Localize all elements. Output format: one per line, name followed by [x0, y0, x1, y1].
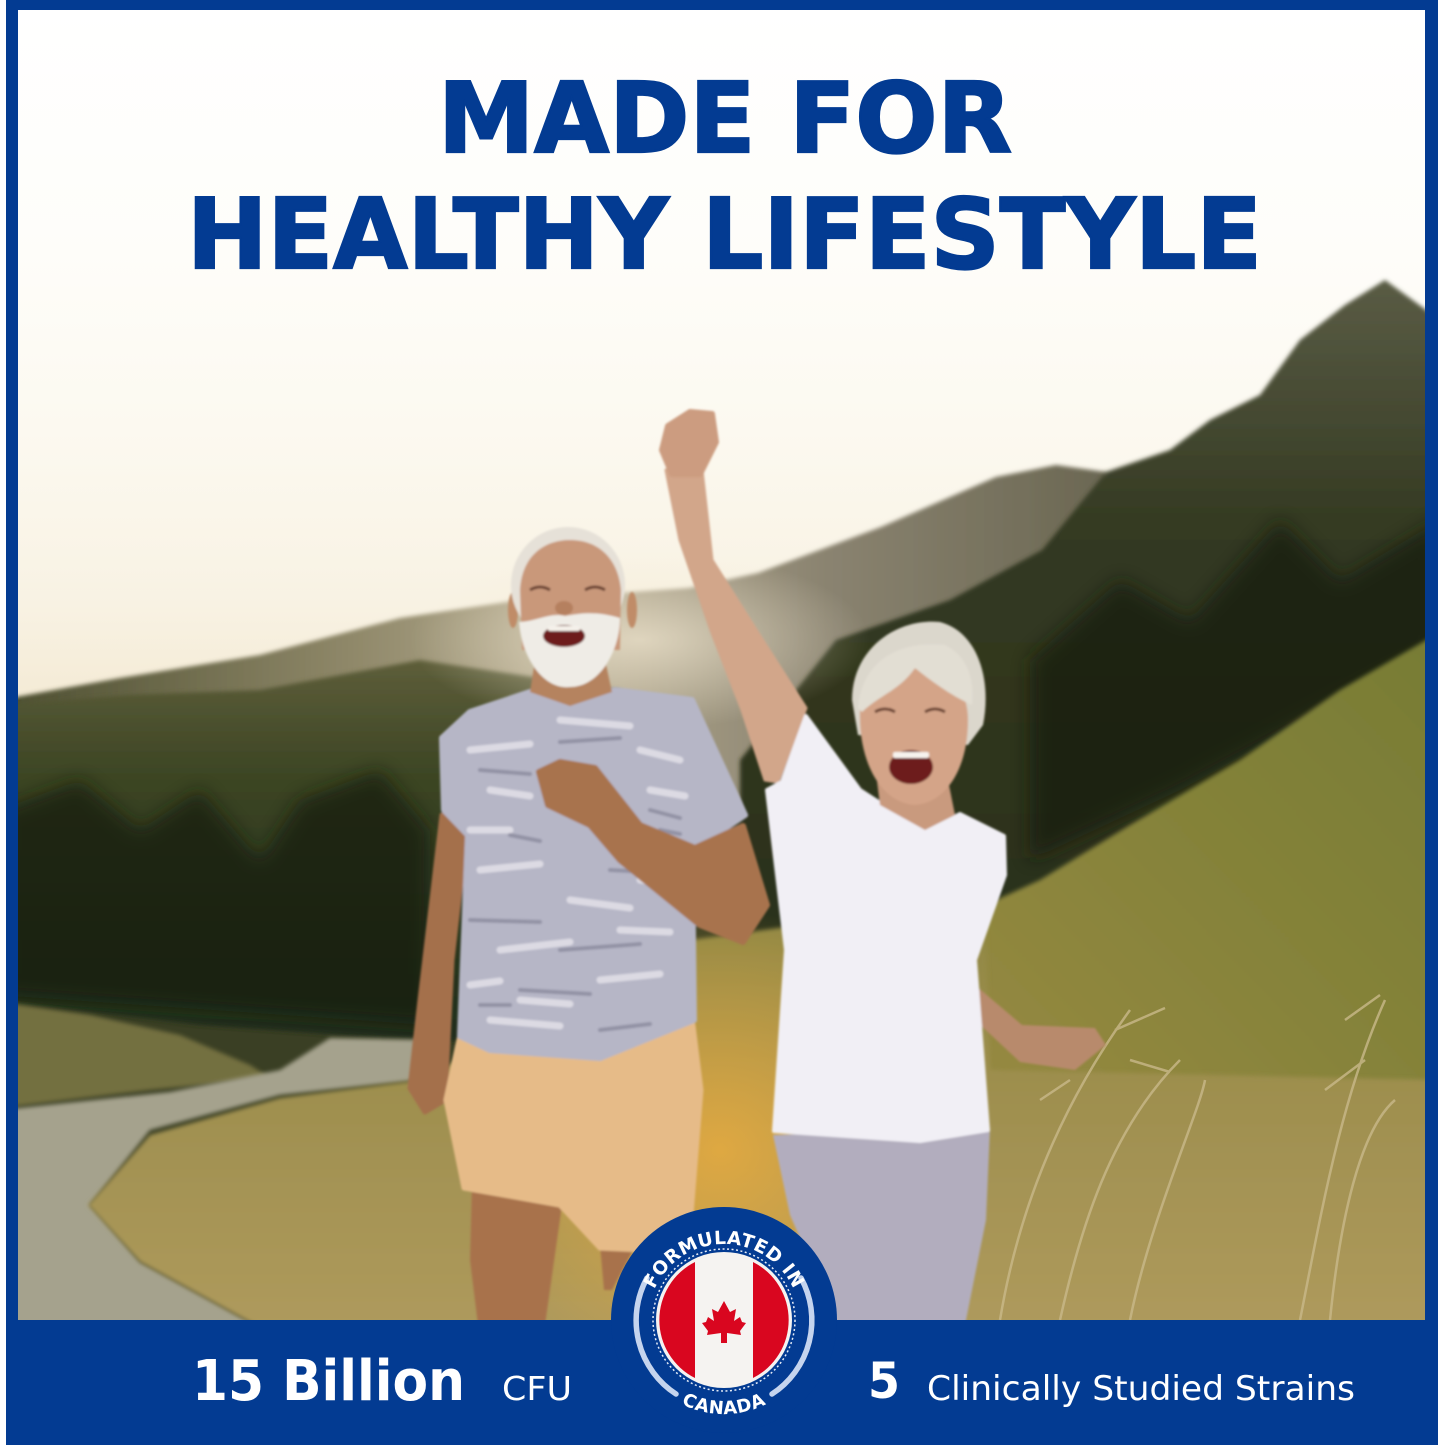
distant hill — [0, 465, 1150, 820]
haze around the low sun — [438, 576, 856, 714]
flag white field — [656, 1252, 792, 1388]
right forest — [740, 280, 1440, 980]
woman face — [860, 668, 968, 805]
left forest — [18, 658, 533, 1042]
woman far arm — [975, 985, 1106, 1070]
woman hair — [852, 622, 986, 745]
photo: runners in a meadow — [18, 276, 1425, 1320]
woman neck — [876, 780, 956, 831]
side ring arcs — [636, 1278, 812, 1394]
badge: formulated in Canada — [611, 1207, 837, 1414]
stat: 15 Billion CFU: CFU — [502, 1369, 572, 1408]
man — [410, 527, 767, 1325]
shirt mottling light — [470, 720, 685, 1026]
flag — [656, 1252, 792, 1388]
stat: 5 clinically studied strains: 5 — [868, 1352, 900, 1410]
title line 1: MADE FOR — [438, 62, 1012, 175]
forest shadows — [0, 520, 1440, 1025]
badge top text: FORMULATED IN — [643, 1230, 804, 1288]
stat: 15 Billion CFU: 15 Billion — [192, 1349, 465, 1414]
flag red bars — [659, 1262, 789, 1378]
woman eyes — [875, 709, 945, 712]
stat: 5 clinically studied strains: Clinically Studied Strains — [927, 1369, 1355, 1409]
ground backing — [18, 820, 744, 1320]
road — [18, 1035, 414, 1320]
man shorts — [446, 1025, 701, 1252]
man eyes — [530, 587, 605, 590]
man hair — [510, 527, 625, 618]
man legs — [470, 1185, 632, 1325]
stat: 5 clinically studied strains — [868, 1352, 1355, 1410]
badge disc — [611, 1207, 837, 1433]
man arm right — [539, 762, 767, 942]
dotted ring — [653, 1249, 795, 1391]
man arm left — [410, 815, 466, 1112]
man nose — [555, 601, 573, 615]
grass hill — [984, 638, 1425, 1082]
wheat stalks — [1000, 995, 1395, 1320]
man neck — [530, 660, 612, 706]
man mouth — [543, 625, 585, 647]
man face — [520, 540, 621, 650]
woman raised arm — [666, 470, 806, 782]
far left bank — [0, 1002, 270, 1108]
maple leaf — [702, 1301, 746, 1343]
bottom band — [6, 1320, 1438, 1445]
shirt mottling dark — [470, 738, 680, 1030]
golden glow — [553, 925, 800, 1320]
woman fist — [662, 412, 716, 474]
woman fringe — [858, 644, 973, 712]
title — [187, 62, 1262, 291]
man ears — [508, 592, 518, 628]
title line 2: HEALTHY LIFESTYLE — [187, 178, 1262, 291]
woman mouth — [889, 750, 933, 784]
woman jeans — [773, 1128, 990, 1325]
man beard — [519, 613, 620, 687]
sky — [18, 294, 1425, 698]
woman — [662, 412, 1106, 1325]
meadow field — [88, 900, 1440, 1325]
badge bottom text: CANADA — [684, 1394, 766, 1414]
woman shirt — [767, 716, 1005, 1141]
man shirt — [442, 690, 745, 1058]
